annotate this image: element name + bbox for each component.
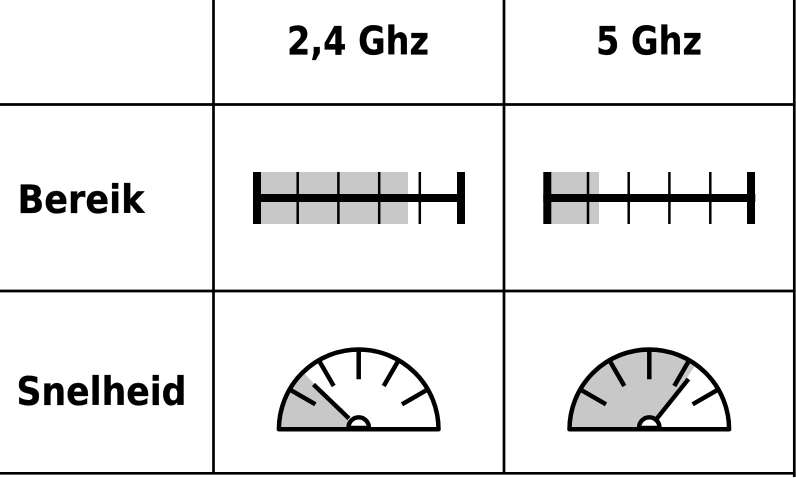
- range bar: 5 Ghz: [543, 172, 755, 224]
- row heading: Snelheid: Snelheid: [16, 370, 186, 415]
- column heading: 2,4 Ghz: 2,4 Ghz: [287, 20, 429, 64]
- row heading: Bereik: Bereik: [18, 178, 145, 223]
- speed gauge: 2,4 Ghz: [279, 349, 439, 429]
- speed gauge: 5 Ghz: [570, 350, 729, 429]
- column heading: 5 Ghz: 5 Ghz: [596, 20, 702, 64]
- range bar: 2,4 Ghz: [253, 172, 465, 224]
